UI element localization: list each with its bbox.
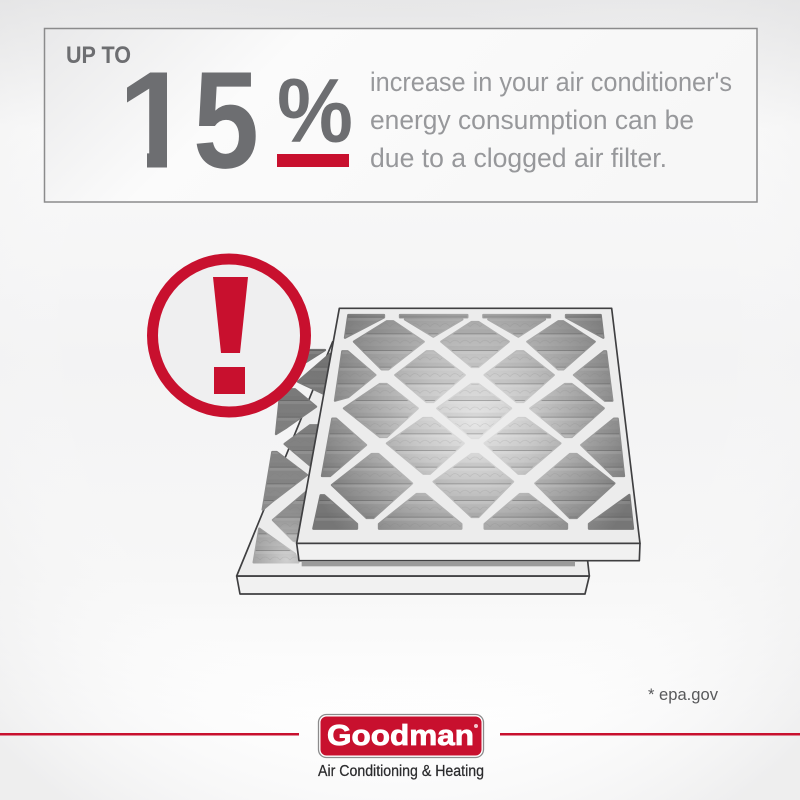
front filter panes xyxy=(313,315,633,529)
big number: 15: 1 xyxy=(117,44,194,198)
logo: Goodman: Goodman xyxy=(327,720,474,752)
footer rule right xyxy=(500,733,800,736)
percent sign: % xyxy=(277,61,353,162)
description text xyxy=(370,67,732,173)
illustration: back air filter xyxy=(237,342,589,594)
icon: red exclamation warning xyxy=(152,259,306,412)
logo: Goodman xyxy=(318,714,484,758)
label: up to: UP TO xyxy=(66,42,131,69)
footnote: * epa.gov xyxy=(648,685,718,704)
back filter panes xyxy=(254,350,575,566)
description text: due to a clogged air filter. xyxy=(370,143,667,173)
panel: statistic callout xyxy=(44,28,757,202)
red underline xyxy=(277,154,349,167)
description text: increase in your air conditioner's xyxy=(370,67,732,97)
big number: 15: 5 xyxy=(193,44,259,198)
tagline: Air Conditioning & Heating xyxy=(318,763,484,780)
illustration: front air filter xyxy=(297,308,640,561)
footer rule left xyxy=(0,733,299,736)
description text: energy consumption can be xyxy=(370,105,694,135)
big number: 15 xyxy=(127,72,256,169)
